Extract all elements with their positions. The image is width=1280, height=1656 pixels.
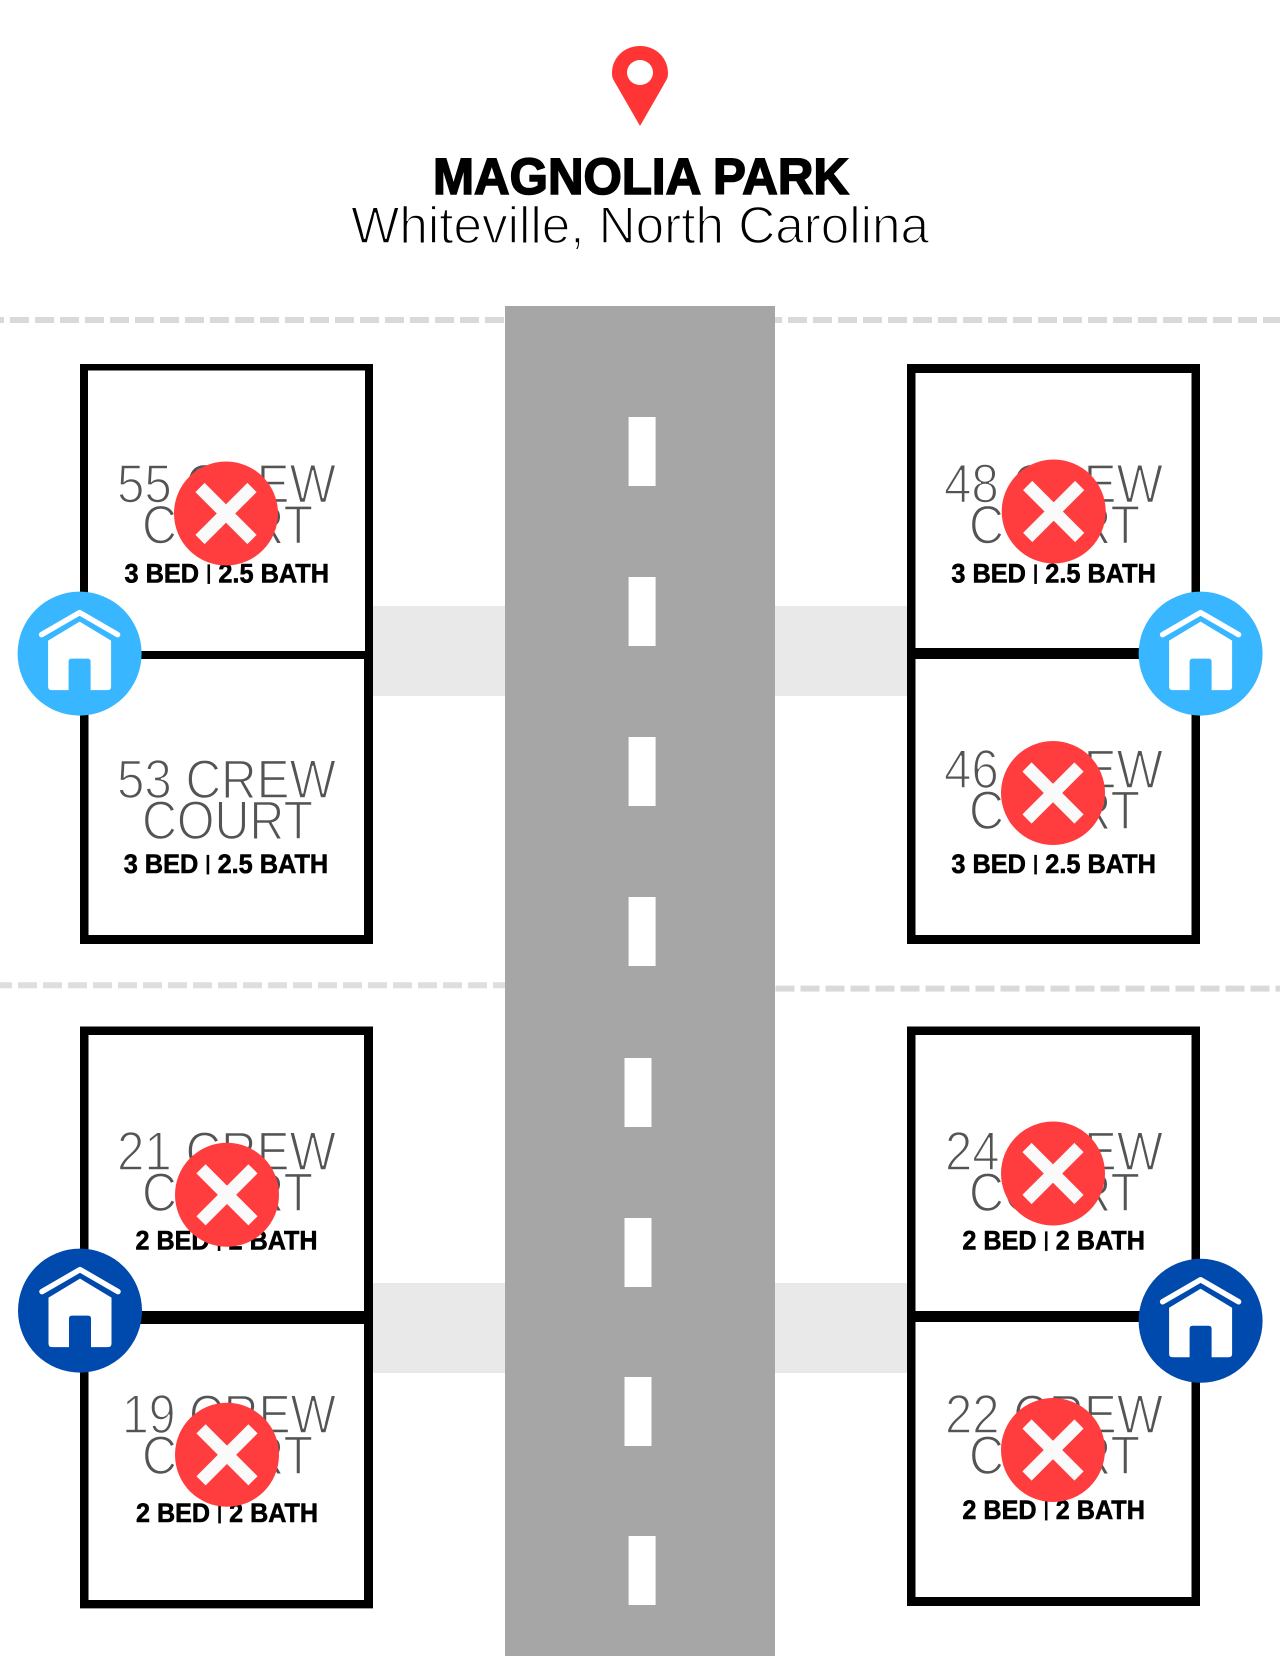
driveway: upper right bbox=[775, 606, 907, 696]
unit label: 24 Crew Court: | bbox=[1044, 1229, 1049, 1251]
unit label: 19 Crew Court bbox=[122, 1383, 336, 1528]
unit label: 53 Crew Court: 3 BED bbox=[124, 849, 203, 879]
icon: home badge upper left bbox=[18, 592, 142, 716]
unit label: 22 Crew Court: 2 BED bbox=[962, 1495, 1042, 1525]
unit label: 55 Crew Court: | bbox=[206, 562, 211, 584]
icon: red X on 24 bbox=[1001, 1122, 1105, 1226]
unit label: 48 Crew Court bbox=[944, 452, 1163, 588]
icon: red X on 55 bbox=[174, 462, 278, 566]
icon: red X on 22 bbox=[1001, 1398, 1105, 1502]
unit label: 19 Crew Court: COURT bbox=[142, 1424, 313, 1486]
unit label: 46 Crew Court: COURT bbox=[969, 779, 1140, 841]
unit label: 53 Crew Court: 53 CREW bbox=[117, 748, 336, 810]
unit label: 48 Crew Court: 2.5 BATH bbox=[1038, 558, 1156, 588]
unit label: 46 Crew Court bbox=[944, 738, 1163, 879]
unit label: 21 Crew Court: 21 CREW bbox=[117, 1120, 336, 1182]
unit label: 46 Crew Court: 46 CREW bbox=[944, 738, 1163, 800]
driveway: upper left bbox=[373, 606, 505, 696]
unit label: 24 Crew Court: 2 BATH bbox=[1049, 1225, 1145, 1255]
building outline: upper left bbox=[80, 364, 373, 944]
building outline: lower right bbox=[907, 1026, 1200, 1606]
icon: red X on 21 bbox=[175, 1143, 279, 1247]
icon: home badge lower left bbox=[18, 1249, 142, 1373]
road bbox=[505, 306, 775, 1656]
unit label: 48 Crew Court: | bbox=[1033, 562, 1038, 584]
unit label: 22 Crew Court: 22 CREW bbox=[945, 1383, 1163, 1445]
unit label: 55 Crew Court bbox=[117, 452, 336, 588]
unit label: 19 Crew Court: 19 CREW bbox=[122, 1383, 336, 1445]
unit label: 22 Crew Court: COURT bbox=[969, 1424, 1140, 1486]
icon: red X on 46 bbox=[1001, 741, 1105, 845]
unit label: 53 Crew Court bbox=[117, 748, 336, 879]
unit label: 22 Crew Court: | bbox=[1044, 1499, 1049, 1521]
unit label: 55 Crew Court: 55 CREW bbox=[117, 452, 336, 514]
unit label: 55 Crew Court: 2.5 BATH bbox=[211, 558, 329, 588]
unit label: 19 Crew Court: | bbox=[217, 1502, 222, 1524]
unit label: 48 Crew Court: 48 CREW bbox=[944, 452, 1163, 514]
unit label: 21 Crew Court: 2 BATH bbox=[222, 1225, 318, 1255]
icon: red X on 19 bbox=[175, 1403, 279, 1507]
title: MAGNOLIA PARK bbox=[433, 148, 849, 205]
unit label: 22 Crew Court bbox=[945, 1383, 1163, 1525]
icon: location pin bbox=[612, 46, 668, 126]
unit label: 53 Crew Court: 2.5 BATH bbox=[211, 849, 328, 879]
building outline: lower left bbox=[80, 1026, 373, 1608]
subtitle: Whiteville, North Carolina bbox=[351, 197, 929, 255]
unit label: 55 Crew Court: COURT bbox=[142, 494, 313, 556]
unit label: 53 Crew Court: COURT bbox=[142, 789, 313, 851]
driveway: lower right bbox=[775, 1283, 907, 1373]
icon: home badge lower right bbox=[1139, 1259, 1263, 1383]
unit label: 21 Crew Court: 2 BED bbox=[136, 1225, 215, 1255]
unit label: 46 Crew Court: 2.5 BATH bbox=[1038, 849, 1156, 879]
unit label: 22 Crew Court: 2 BATH bbox=[1049, 1495, 1145, 1525]
unit label: 19 Crew Court: 2 BATH bbox=[222, 1498, 318, 1528]
unit label: 24 Crew Court: 24 CREW bbox=[945, 1120, 1163, 1182]
unit label: 53 Crew Court: | bbox=[205, 853, 211, 875]
unit label: 46 Crew Court: 3 BED bbox=[951, 849, 1031, 879]
unit label: 19 Crew Court: 2 BED bbox=[136, 1498, 216, 1528]
driveway: lower left bbox=[373, 1283, 505, 1373]
unit label: 21 Crew Court bbox=[117, 1120, 336, 1255]
unit label: 24 Crew Court: COURT bbox=[969, 1161, 1140, 1223]
icon: home badge upper right bbox=[1139, 592, 1263, 716]
unit label: 21 Crew Court: COURT bbox=[142, 1161, 313, 1223]
unit label: 24 Crew Court bbox=[945, 1120, 1163, 1255]
building outline: upper right bbox=[907, 364, 1200, 944]
icon: red X on 48 bbox=[1002, 460, 1106, 564]
unit label: 46 Crew Court: | bbox=[1033, 853, 1038, 875]
unit label: 48 Crew Court: 3 BED bbox=[951, 558, 1031, 588]
unit label: 24 Crew Court: 2 BED bbox=[962, 1225, 1042, 1255]
unit label: 55 Crew Court: 3 BED bbox=[124, 558, 204, 588]
unit label: 21 Crew Court: | bbox=[216, 1229, 222, 1251]
road centre dashes bbox=[624, 417, 656, 1605]
unit label: 48 Crew Court: COURT bbox=[969, 494, 1140, 556]
